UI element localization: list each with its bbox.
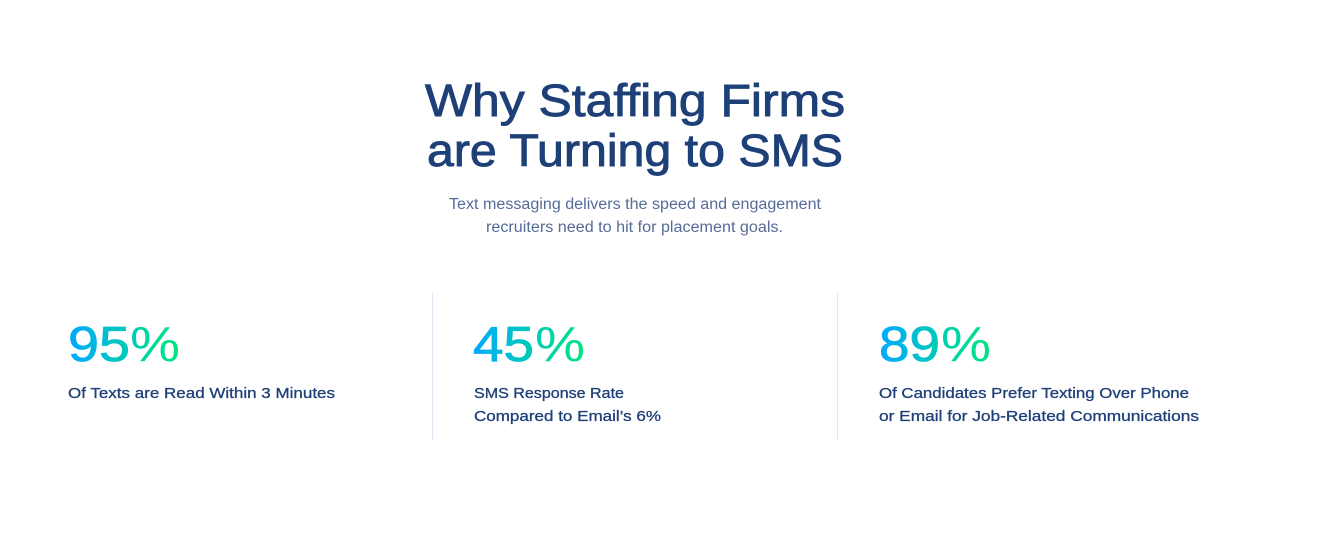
stat number: 95%: 95 — [68, 318, 130, 372]
stat label: texts read: Of Texts are Read Within 3 Minutes — [68, 385, 335, 402]
stat label: candidate preference: Of Candidates Prefer Texting Over Phone — [879, 385, 1189, 402]
stat number: 89%: % — [941, 318, 991, 372]
stat number: 89%: 89 — [879, 318, 940, 372]
subtitle text: recruiters need to hit for placement goals. — [486, 219, 783, 236]
stat number: 45%: % — [535, 318, 585, 372]
stat label: response rate: Compared to Email’s 6% — [474, 408, 661, 425]
panel: stat 89% — [879, 318, 1199, 425]
panel: stat 45% — [473, 318, 661, 425]
panel: stat 95% — [68, 318, 335, 402]
title — [425, 75, 845, 176]
stat number: 95%: % — [130, 318, 180, 372]
stat label: candidate preference — [879, 385, 1199, 425]
stat number: 95% — [68, 318, 180, 372]
stat number: 45% — [473, 318, 585, 372]
stat label: response rate — [474, 385, 661, 425]
title: Why Staffing Firms — [425, 75, 845, 126]
stat label: response rate: SMS Response Rate — [474, 385, 624, 402]
subtitle text: Text messaging delivers the speed and engagement — [449, 196, 822, 213]
stat number: 45%: 45 — [473, 318, 534, 372]
subtitle text — [449, 196, 822, 236]
stat number: 89% — [879, 318, 991, 372]
stat label: candidate preference: or Email for Job-Related Communications — [879, 408, 1199, 425]
title: are Turning to SMS — [427, 125, 843, 176]
